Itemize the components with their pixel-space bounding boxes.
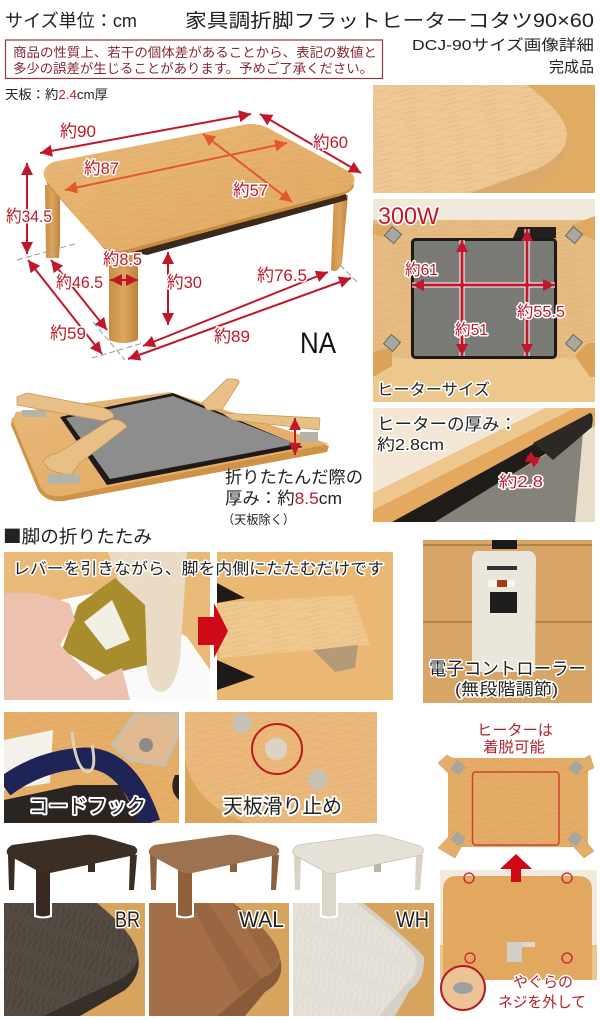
photo: heater size [373,199,595,402]
dimension labels: 約90 [60,122,96,141]
folded thickness note [222,468,363,527]
photo: tabletop corner close-up [373,85,595,193]
arrow: heater removal [500,854,532,882]
photo: non-slip tabletop pad [185,712,377,823]
photo: electronic controller: 電子コントローラー [429,659,586,679]
inset: screw close-up [441,966,485,1010]
diagram: table underside with screws [440,870,597,980]
finished product label: 完成品 [549,59,594,76]
screw markers [464,873,572,963]
photo: folded leg [217,552,393,700]
photo: heater thickness [373,408,595,522]
photo: electronic controller: (無段階調節) [455,680,558,699]
table legs and brackets [373,216,595,377]
callout: individual variance notice: 商品の性質上、若干の個体差があることから、表記の数値と [13,45,377,60]
photo: cord hook: コードフック [29,795,146,818]
diagram: NA table with dimensions [6,114,361,360]
model subtitle: DCJ-90サイズ画像詳細 [412,37,594,54]
dimension labels: 約76.5 [257,266,307,285]
callout: individual variance notice [6,40,382,78]
dimension arrows [27,114,361,359]
photo: folded table [11,379,329,501]
hand [4,592,130,700]
colour code labels: WH [396,907,429,932]
brackets [22,410,318,484]
swatch: BR corner [4,903,145,1016]
title: 家具調折脚フラットヒーターコタツ90×60 [185,10,594,32]
dimension labels: 約34.5 [6,207,52,226]
wattage and heater labels: 300W [378,203,439,230]
thickness labels: 約2.8cm [377,436,444,454]
folded thickness note: 厚み：約8.5cm [225,489,342,508]
folding caption: レバーを引きながら、脚を内側にたたむだけです [13,560,384,578]
callout: individual variance notice: 多少の誤差が生じることがあります。予めご了承ください。 [13,61,373,76]
wattage and heater labels: 約55.5 [517,303,565,321]
wattage and heater labels: ヒーターサイズ [377,381,490,399]
wattage and heater labels: 約61 [405,261,438,279]
wattage and heater labels [377,203,565,399]
metal bracket [62,578,147,675]
thickness labels: 約2.8 [499,473,543,491]
caption: remove frame screws [498,974,586,1011]
table: WH white [293,835,423,918]
heater dimension arrows [412,229,555,356]
photo: non-slip tabletop pad: 天板滑り止め [223,795,342,818]
swatch: WH corner [293,903,434,1016]
table: BR dark brown [7,835,137,918]
dimension labels: 約60 [313,133,348,152]
arrow: folding direction [198,603,228,658]
dimension labels: 約46.5 [56,273,103,292]
photo: cord hook [4,712,179,823]
tabletop thickness note: 天板：約2.4cm厚 [5,87,108,102]
photo: pulling the lever [4,552,210,700]
extension lines [17,243,357,360]
controller body [472,540,536,672]
swatch: WAL corner [149,903,289,1016]
underside legs [438,755,594,858]
red heater outline [472,772,559,845]
folded legs [17,379,320,476]
table illustration [44,124,355,343]
wattage and heater labels: 約51 [455,321,488,339]
dimension labels: 約30 [167,273,202,292]
photo: electronic controller [423,540,592,703]
caption: remove frame screws: やぐらの [513,974,573,991]
heading: size unit: サイズ単位：cm [5,11,137,31]
dimension labels: 約57 [233,181,268,200]
red highlight circle [252,724,302,774]
folded thickness note: （天板除く） [222,513,295,527]
dimension labels: 約8.5 [103,250,142,269]
dimension labels: 約89 [214,327,250,346]
thickness labels: ヒーターの厚み： [377,415,517,434]
brackets [450,760,584,846]
folded heater [60,393,303,485]
colour code NA: NA [300,327,336,360]
thickness labels [377,415,543,491]
section heading: leg folding: ■脚の折りたたみ [3,523,152,549]
colour code labels: BR [115,907,140,932]
dimension labels [6,122,348,346]
diagram: table underside without heater [438,755,594,858]
colour code labels [115,907,429,932]
note: heater removable: 着脱可能 [483,739,545,756]
heater panel [412,227,556,358]
note: heater removable [477,722,553,756]
table: WAL walnut [149,835,279,918]
folded thickness note: 折りたたんだ際の [225,468,363,487]
caption: remove frame screws: ネジを外して [498,994,586,1011]
dimension labels: 約59 [50,324,86,343]
colour code labels: WAL [239,907,284,932]
dimension labels: 約87 [84,159,119,178]
thickness arrow [294,418,296,455]
note: heater removable: ヒーターは [477,722,553,739]
